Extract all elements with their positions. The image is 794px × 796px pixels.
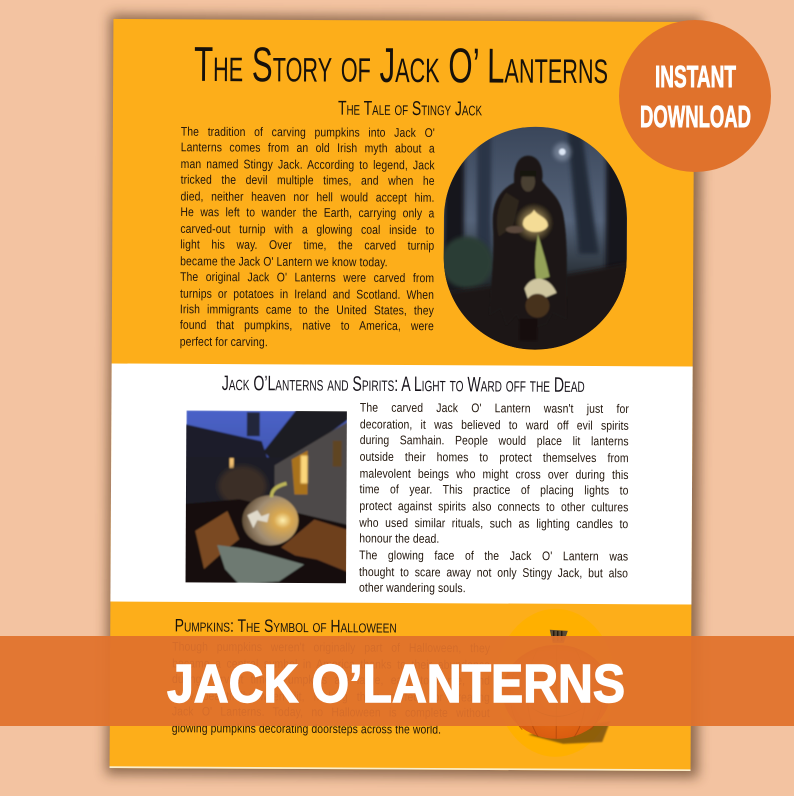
text: lanterns and spirits: protect against spirits also connects to other cultures xyxy=(359,500,628,515)
text: stingy jack story: He was left to wander the Earth, carrying only a xyxy=(180,207,434,221)
cottage roof left xyxy=(186,424,268,459)
heading: the tale of stingy jack: The Tale of Stingy Jack xyxy=(338,98,483,120)
text: lanterns and spirits: The glowing face of the Jack O' Lantern was xyxy=(359,550,628,564)
pumpkin stem xyxy=(271,483,287,497)
autumn leaves left xyxy=(195,511,239,569)
badge text xyxy=(640,59,751,134)
sheet artwork with headings and pictures xyxy=(98,6,710,786)
stone wall right xyxy=(274,421,348,530)
text: lanterns and spirits: during Samhain. People would place lit lanterns xyxy=(360,435,629,449)
text: pumpkins symbol xyxy=(172,641,490,737)
legs xyxy=(519,319,537,341)
text: pumpkins symbol: became a central symbol in America thanks to their abundance xyxy=(172,657,490,672)
lantern glow xyxy=(514,203,554,243)
moon xyxy=(559,148,566,155)
forest trees xyxy=(443,128,630,301)
text: lanterns and spirits: thought to scare away not only Stingy Jack, but also xyxy=(359,566,628,581)
stem stripes xyxy=(554,631,562,641)
text: lanterns and spirits: time of year. This practice of placing lights to xyxy=(359,484,629,499)
banner title: JACK O’LANTERNS xyxy=(167,654,625,714)
text: stingy jack story: Lanterns comes from an old Irish myth about a xyxy=(181,142,435,157)
hooded cloak xyxy=(489,155,568,331)
shrub xyxy=(218,466,267,506)
text: lanterns and spirits: outside their homes to protect themselves from xyxy=(360,451,629,466)
text: lanterns and spirits: decoration, it was believed to ward off evil spirits xyxy=(360,418,629,433)
stone wall left xyxy=(186,456,276,505)
badge: instant download xyxy=(619,20,771,172)
figure group xyxy=(489,155,568,341)
side window xyxy=(333,441,342,467)
misty forest backdrop xyxy=(443,126,627,350)
autumn leaves right xyxy=(281,519,347,572)
pumpkin stem xyxy=(550,630,568,643)
picture: orange pumpkin with glow xyxy=(495,608,616,757)
forest path xyxy=(443,262,627,350)
text: stingy jack story: Irish immigrants came to the United States, they xyxy=(180,304,434,318)
text: stingy jack story: The tradition of carving pumpkins into Jack O' xyxy=(181,126,435,141)
heading: jack o'lanterns and spirits: Jack O’Lanterns and Spirits: A Light to Ward off the Dead xyxy=(222,372,585,397)
yellow glow xyxy=(495,608,616,757)
text: lanterns and spirits xyxy=(359,402,629,596)
small lit window xyxy=(230,458,234,468)
moon glow xyxy=(553,143,571,161)
turnip roots xyxy=(525,294,550,318)
picture: hooded figure in a forest xyxy=(440,126,630,350)
text: pumpkins symbol: glowing pumpkins decorating doorsteps across the world. xyxy=(172,722,441,737)
text: stingy jack story: man named Stingy Jack. According to legend, Jack xyxy=(181,158,435,173)
text: lanterns and spirits: honour the dead. xyxy=(359,533,439,547)
poster sheet xyxy=(98,6,710,786)
text: pumpkins symbol: during harvest time. Pumpkins are large, easy to carve, and xyxy=(172,673,490,688)
carved face xyxy=(530,707,584,717)
text: stingy jack story: died, neither heaven nor hell would accept him. xyxy=(180,191,435,205)
text: lanterns and spirits: who used similar rituals, such as lighting candles to xyxy=(359,517,628,531)
text: lanterns and spirits: The carved Jack O' Lantern wasn't just for xyxy=(360,402,629,417)
text: stingy jack story: found that pumpkins, native to America, were xyxy=(180,320,434,334)
picture: pale pumpkin by a stone cottage xyxy=(183,410,348,585)
dark foreground xyxy=(183,499,347,585)
pumpkin body xyxy=(502,645,611,739)
stone slab xyxy=(217,545,304,584)
lit door glow xyxy=(301,455,308,484)
glowing turnip xyxy=(523,210,548,232)
chimney xyxy=(247,412,260,436)
text: stingy jack story: light his way. Over time, the carved turnip xyxy=(180,239,434,254)
hands xyxy=(506,226,524,233)
text: lanterns and spirits: other wandering souls. xyxy=(359,582,466,596)
turnip bulbs xyxy=(524,279,557,301)
hooded face xyxy=(521,172,535,192)
pumpkin shadow xyxy=(528,721,610,744)
cloak highlight xyxy=(497,192,519,237)
carved face xyxy=(247,510,269,528)
cottage roof right xyxy=(264,411,347,461)
text: stingy jack story xyxy=(180,126,435,350)
text: stingy jack story: The original Jack O' Lanterns were carved from xyxy=(180,271,434,286)
orange sheet background xyxy=(110,19,694,771)
dusk sky xyxy=(186,410,347,458)
lit door xyxy=(291,450,308,495)
pumpkin ribs xyxy=(510,645,603,739)
text: stingy jack story: tricked the devil multiple times, and when he xyxy=(181,174,435,189)
text: stingy jack story: became the Jack O' Lantern we know today. xyxy=(180,255,388,269)
text: stingy jack story: turnips or potatoes in Ireland and Scotland. When xyxy=(180,287,434,302)
banner strip xyxy=(0,636,794,726)
text: stingy jack story: carved-out turnip with a glowing coal inside to xyxy=(180,223,434,237)
lit pumpkin body xyxy=(242,495,298,545)
face shadow xyxy=(520,171,536,177)
heading: pumpkins the symbol of halloween: Pumpkins: The Symbol of Halloween xyxy=(175,615,397,637)
painted scene xyxy=(183,410,348,585)
text: pumpkins symbol: Jack O' Lanterns. Today, no Halloween is complete without xyxy=(172,706,490,721)
sheet shadow xyxy=(106,14,702,778)
badge circle xyxy=(619,20,771,172)
white section band xyxy=(110,363,693,605)
text: pumpkins symbol: Though pumpkins weren't originally part of Halloween, they xyxy=(172,641,490,656)
bottom paper edge xyxy=(110,766,691,771)
turnip leaves xyxy=(535,234,550,281)
bushes xyxy=(441,236,493,288)
text: pumpkins symbol: glow beautifully when lit, making them perfect for creating xyxy=(172,690,490,704)
text: stingy jack story: perfect for carving. xyxy=(180,336,268,350)
text: lanterns and spirits: malevolent beings who might cross over during this xyxy=(360,468,629,482)
